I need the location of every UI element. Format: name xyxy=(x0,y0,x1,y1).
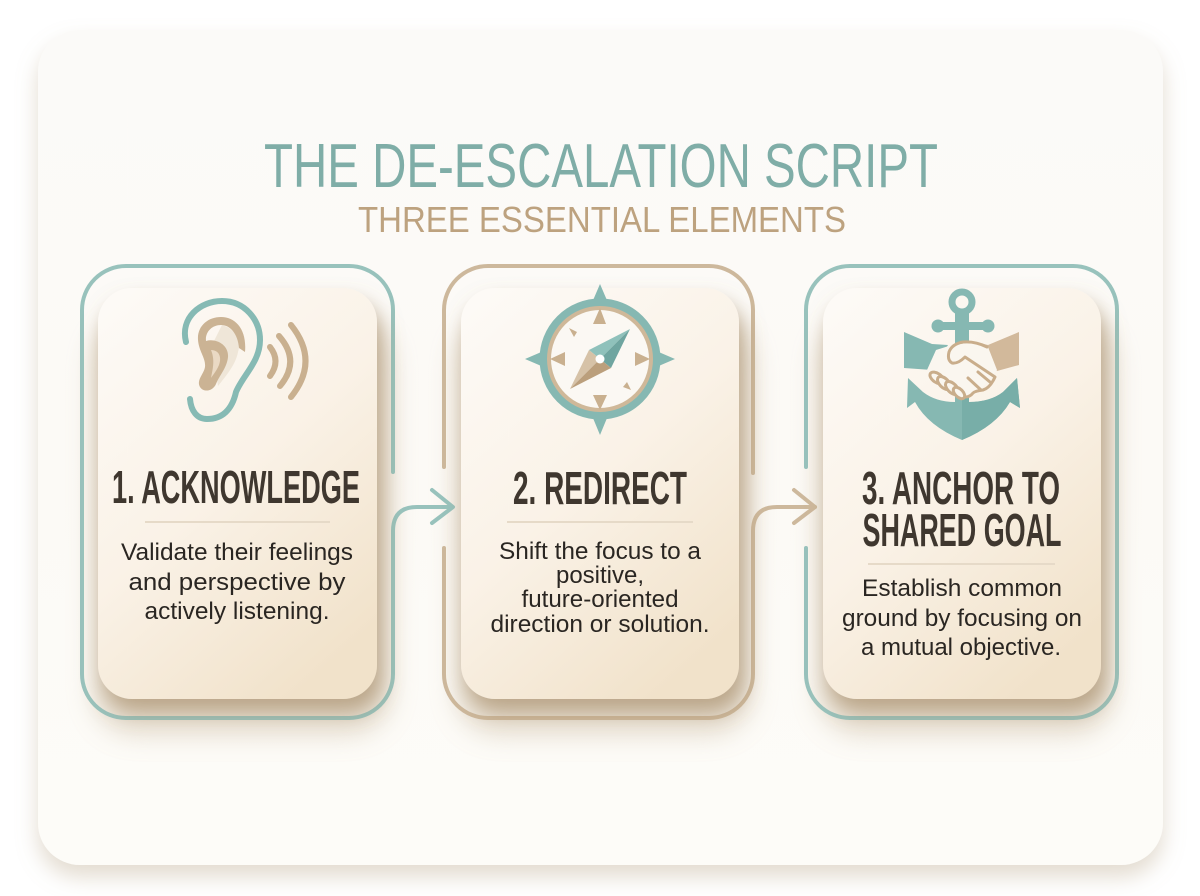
icon: compass xyxy=(525,284,675,435)
body text: and perspective by xyxy=(128,569,346,596)
frame outline xyxy=(806,266,1117,718)
card xyxy=(823,288,1101,699)
body text: Shift the focus to a xyxy=(499,538,702,565)
title: THE DE-ESCALATION SCRIPT xyxy=(264,132,938,201)
body text: Validate their feelings xyxy=(121,539,353,566)
icon: anchor with handshake xyxy=(904,292,1020,440)
frame outline with arrow to step 2 xyxy=(82,266,453,718)
heading xyxy=(862,462,1062,556)
body text: direction or solution. xyxy=(490,611,710,638)
card xyxy=(98,288,377,699)
body text: a mutual objective. xyxy=(861,634,1061,661)
heading: 1. ACKNOWLEDGE xyxy=(112,461,360,513)
card xyxy=(461,288,739,699)
heading: 3. ANCHOR TO xyxy=(862,462,1060,514)
body text xyxy=(490,538,710,638)
body text: future-oriented xyxy=(522,586,678,613)
body text: positive, xyxy=(556,562,644,589)
body text: actively listening. xyxy=(144,598,330,625)
panel: step 2 redirect xyxy=(444,266,815,718)
panel: step 1 acknowledge xyxy=(82,266,453,718)
body text xyxy=(842,575,1082,661)
icon: ear with sound waves xyxy=(185,301,306,419)
body text xyxy=(121,539,353,625)
body text: ground by focusing on xyxy=(842,605,1082,632)
heading: 2. REDIRECT xyxy=(513,462,687,514)
subtitle: THREE ESSENTIAL ELEMENTS xyxy=(358,199,846,240)
body text: Establish common xyxy=(862,575,1062,602)
panel: step 3 anchor to shared goal xyxy=(806,266,1117,718)
frame outline with arrow to step 3 xyxy=(444,266,815,718)
heading: SHARED GOAL xyxy=(862,504,1062,556)
